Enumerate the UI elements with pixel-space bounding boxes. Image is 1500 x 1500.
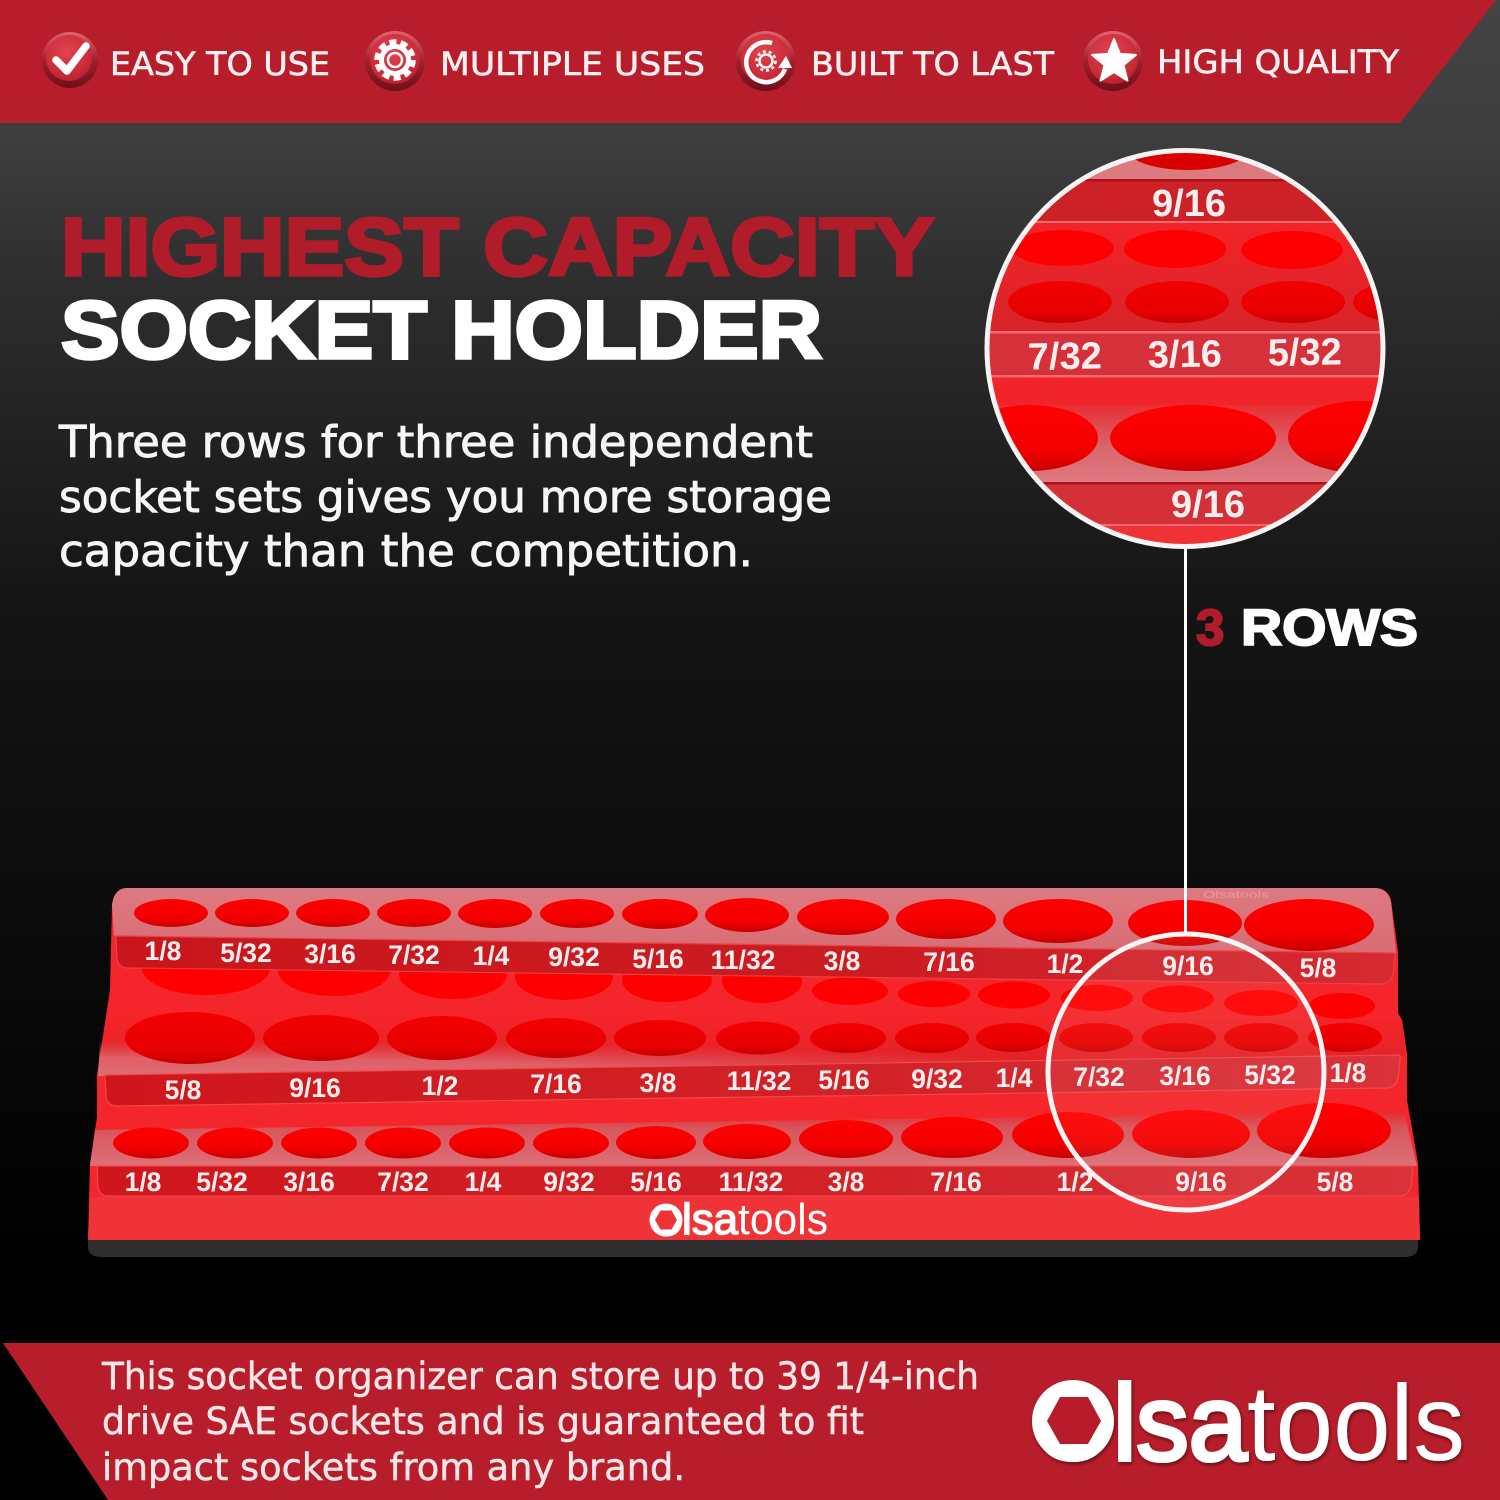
- top row size labels: 3/16: [304, 939, 356, 969]
- footer text: drive SAE sockets and is guaranteed to fit: [102, 1400, 864, 1443]
- bottom row size labels: 11/32: [719, 1167, 783, 1197]
- description text: Three rows for three independent: [58, 417, 813, 468]
- top row size labels: 1/8: [145, 936, 181, 966]
- bottom row size labels: 1/2: [1057, 1167, 1093, 1197]
- label: multiple uses: MULTIPLE USES: [440, 45, 705, 83]
- top row size labels: [145, 936, 1336, 983]
- badge: easy to use: [42, 32, 330, 88]
- rubber base: [88, 1230, 1418, 1257]
- label: built to last: BUILT TO LAST: [811, 45, 1054, 83]
- 3 rows label: 3: [1196, 599, 1224, 656]
- top row size labels: 9/16: [1162, 951, 1214, 981]
- icon: gear: [365, 31, 425, 91]
- top row sockets: [134, 898, 1374, 951]
- middle row size labels: 1/2: [422, 1071, 458, 1101]
- magnified size labels: 5/32: [1267, 331, 1342, 375]
- middle row size labels: 5/8: [165, 1075, 201, 1105]
- front logo: [649, 1195, 828, 1246]
- bottom row size labels: [125, 1167, 1353, 1197]
- header banner: [0, 0, 1496, 123]
- holder body: [88, 888, 1420, 1240]
- description text: [58, 417, 832, 577]
- 3 rows label: ROWS: [1241, 599, 1418, 656]
- top tier face: [112, 888, 1396, 953]
- bottom tier face: [90, 1112, 1417, 1166]
- middle row size labels: 5/16: [818, 1065, 870, 1095]
- footer banner: [3, 1343, 1500, 1500]
- magnified size labels: 3/16: [1147, 333, 1222, 377]
- description text: capacity than the competition.: [59, 526, 753, 577]
- magnified size labels: 9/16: [1171, 484, 1245, 526]
- top label strip: [116, 936, 1395, 984]
- top row size labels: 7/16: [923, 947, 975, 977]
- magnified size labels: 7/32: [1027, 335, 1102, 379]
- icon: check mark: [42, 32, 98, 88]
- bottom row size labels: 7/16: [930, 1167, 982, 1197]
- bottom row size labels: 1/4: [465, 1167, 502, 1197]
- label: easy to use: EASY TO USE: [110, 45, 330, 83]
- bottom row size labels: 5/16: [630, 1167, 682, 1197]
- middle row size labels: 7/16: [530, 1069, 582, 1099]
- middle row size labels: 1/4: [996, 1063, 1033, 1093]
- bottom row size labels: 3/16: [283, 1167, 335, 1197]
- footer logo: [1031, 1362, 1465, 1485]
- callout: connector line: [1184, 546, 1187, 935]
- footer text: impact sockets from any brand.: [102, 1446, 685, 1489]
- footer logo: lsa: [1113, 1362, 1248, 1483]
- middle row size labels: [165, 1058, 1366, 1105]
- middle row back sockets: [142, 968, 1375, 1019]
- bottom row size labels: 5/8: [1317, 1167, 1353, 1197]
- top row size labels: 3/8: [824, 946, 860, 976]
- top row size labels: 9/32: [548, 942, 600, 972]
- heading line 1: HIGHEST CAPACITY: [61, 202, 934, 293]
- magnified detail circle: [984, 148, 1386, 549]
- magnified circle outline: [987, 150, 1383, 546]
- middle label strip: [105, 1055, 1400, 1106]
- top row size labels: 1/4: [473, 941, 510, 971]
- bottom row size labels: 5/32: [196, 1167, 248, 1197]
- socket holder product: [88, 888, 1420, 1257]
- magnified size labels: 9/16: [1152, 183, 1226, 225]
- middle row size labels: 3/16: [1159, 1061, 1211, 1091]
- footer logo: O: [1031, 1362, 1115, 1485]
- magnified size labels: [1027, 183, 1342, 526]
- bottom row size labels: 9/16: [1175, 1167, 1227, 1197]
- top row size labels: 1/2: [1047, 949, 1083, 979]
- front logo: lsa: [682, 1195, 739, 1244]
- bottom row size labels: 9/32: [543, 1167, 595, 1197]
- bottom row size labels: 7/32: [377, 1167, 429, 1197]
- bottom row size labels: 1/8: [125, 1167, 161, 1197]
- front face: [88, 1197, 1420, 1240]
- middle row size labels: 9/32: [911, 1064, 963, 1094]
- bottom label strip: [97, 1166, 1413, 1196]
- magnified contents: [990, 153, 1380, 544]
- middle row size labels: 1/8: [1330, 1058, 1366, 1088]
- top row size labels: 5/16: [632, 944, 684, 974]
- middle tier face: [98, 1008, 1406, 1076]
- middle tier pale lip: [98, 1040, 1300, 1076]
- top row size labels: 11/32: [711, 945, 775, 975]
- middle row size labels: 7/32: [1073, 1062, 1125, 1092]
- middle row front sockets: [125, 1012, 1382, 1064]
- engraved top logo: Olsatools: [1203, 890, 1269, 901]
- middle row size labels: 5/32: [1244, 1060, 1296, 1090]
- middle row size labels: 3/8: [640, 1068, 676, 1098]
- heading line 2: SOCKET HOLDER: [61, 285, 822, 376]
- top row size labels: 7/32: [388, 940, 440, 970]
- bottom row size labels: 3/8: [828, 1167, 864, 1197]
- footer logo: tools: [1247, 1362, 1465, 1483]
- badge: multiple uses: [365, 31, 705, 91]
- heading: [61, 202, 934, 376]
- top row size labels: 5/32: [220, 938, 272, 968]
- footer text: This socket organizer can store up to 39 1/4-inch: [101, 1355, 979, 1398]
- middle row size labels: 9/16: [289, 1073, 341, 1103]
- icon: star: [1083, 31, 1143, 91]
- badge: built to last: [736, 31, 1054, 91]
- callout: circle on holder: [1048, 934, 1324, 1210]
- bottom row sockets: [113, 1103, 1391, 1159]
- front logo: tools: [738, 1195, 828, 1244]
- footer text: [101, 1355, 979, 1489]
- label: high quality: HIGH QUALITY: [1157, 43, 1399, 81]
- front logo: O: [649, 1195, 684, 1246]
- middle row size labels: 11/32: [727, 1066, 791, 1096]
- badge: high quality: [1083, 31, 1399, 91]
- top row size labels: 5/8: [1300, 953, 1336, 983]
- description text: socket sets gives you more storage: [59, 472, 832, 523]
- icon: rotating gear: [736, 31, 796, 91]
